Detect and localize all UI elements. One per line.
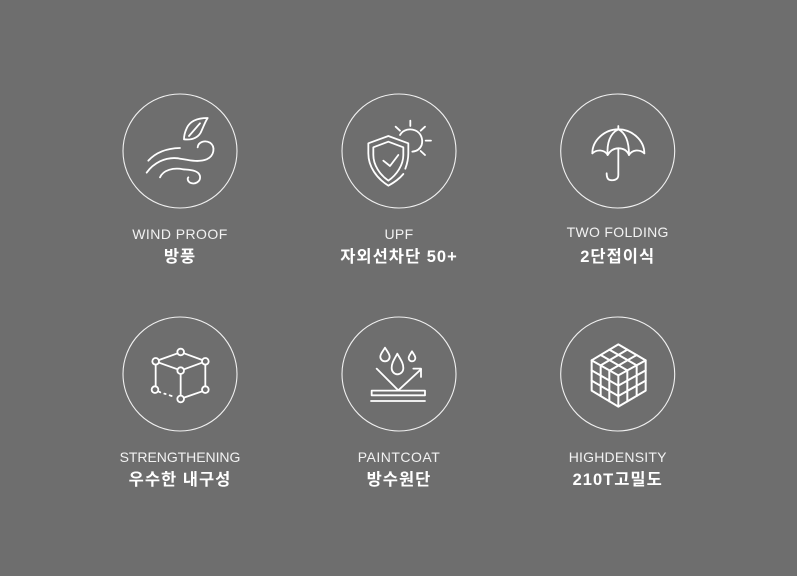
icon: umbrella [592,126,644,180]
panel: two folding [561,94,675,266]
label: 자외선차단 50+: 자외선차단 50+ [340,247,458,266]
panel: wind proof [123,94,237,266]
label: two folding: TWO FOLDING [567,224,669,240]
circle: high density [561,317,675,431]
label: wind proof: WIND PROOF [132,226,228,242]
circle: UPF [342,94,456,208]
icon: shield and sun [368,121,431,186]
icon: grid cube [592,344,646,407]
circle: two folding [561,94,675,208]
circle: strengthening [123,317,237,431]
panel: paintcoat [342,317,456,489]
circle: wind proof [123,94,237,208]
label: 방수원단: 방수원단 [367,470,431,489]
label: UPF: UPF [384,226,414,242]
label: 우수한 내구성: 우수한 내구성 [129,470,231,489]
label: paintcoat: PAINTCOAT [358,449,440,465]
label: high density: HIGHDENSITY [569,449,667,465]
panel: strengthening [120,317,240,489]
circle: paintcoat [342,317,456,431]
icon: wind and leaf [147,118,213,183]
label: 방풍: 방풍 [164,247,196,266]
label: 2단접이식: 2단접이식 [580,247,655,266]
panel: UPF [340,94,458,266]
label: 210T고밀도: 210T고밀도 [573,470,663,489]
panel: high density [561,317,675,489]
icon: cube nodes [152,349,209,402]
label: strengthening: STRENGTHENING [120,449,240,465]
icon: water repellent fabric [371,348,425,401]
